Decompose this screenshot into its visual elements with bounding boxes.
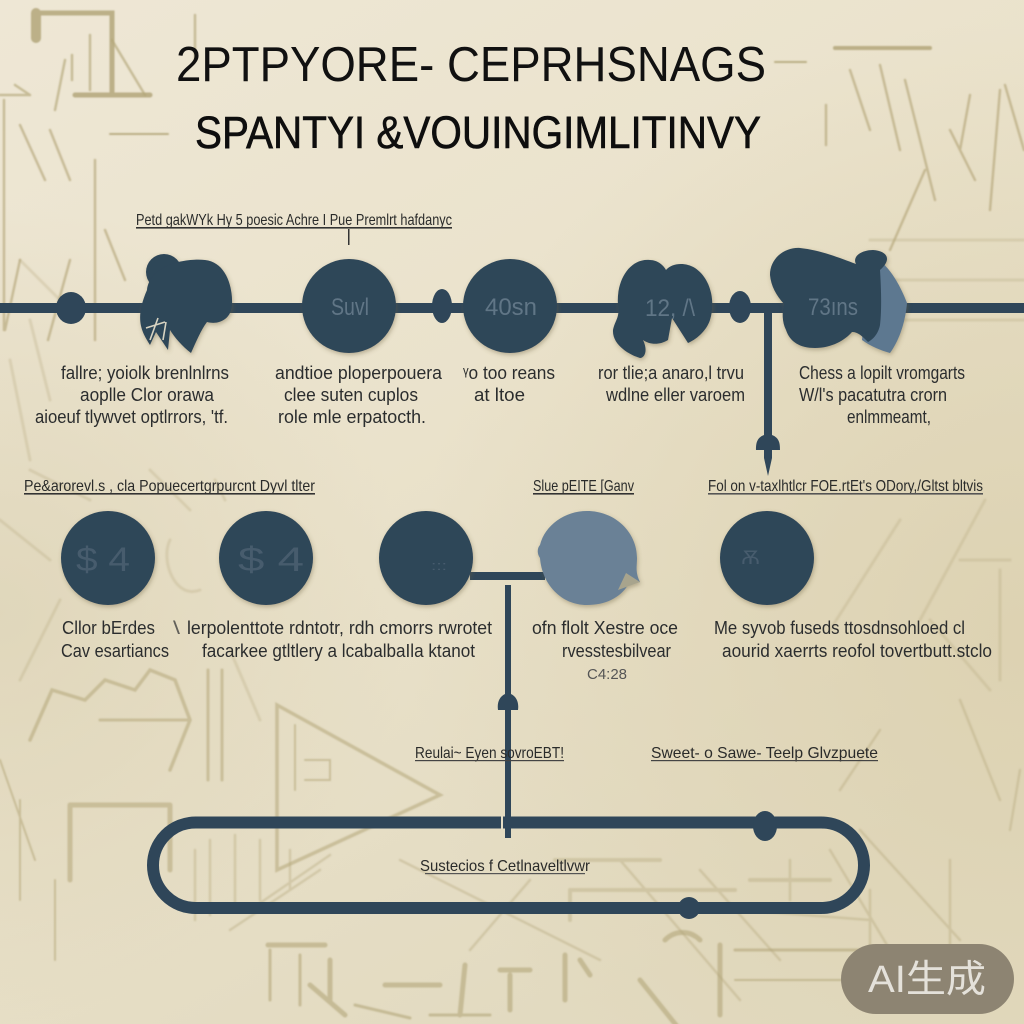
circle icon B: $ 4 — [238, 541, 304, 579]
caption D: ofn flolt Xestre oce — [532, 618, 678, 638]
connector down with arrow — [756, 307, 780, 476]
caption 4: ror tlie;a anaro,l trvu — [598, 363, 744, 383]
circle icon A — [61, 511, 155, 605]
small node 1 — [56, 292, 86, 324]
watermark badge: AI生成 — [868, 959, 986, 1001]
caption 1: aoplle Clor orawa — [80, 385, 215, 405]
caption E — [714, 618, 992, 661]
caption 4 — [598, 363, 745, 405]
loop node top — [753, 811, 777, 841]
title line 2: SPANTYI &VOUINGIMLITINVY — [195, 107, 761, 158]
blob node 5 — [770, 248, 907, 353]
vertical connector with arrow — [498, 585, 518, 838]
caption A: Cav esartiancs — [61, 641, 169, 661]
rounded loop track — [153, 811, 864, 919]
caption D — [532, 618, 678, 683]
circle node 3: 40sn — [485, 294, 537, 321]
section heading: top timeline: Petd gakWYk Hy 5 poesic Achre I Pue Premlrt hafdanyc — [136, 212, 452, 229]
circle node 2 — [302, 259, 396, 353]
caption 3: at ltoe — [474, 385, 525, 405]
bottom label left: Reulai~ Eyen sovroEBT! — [415, 745, 564, 762]
caption E: Me syvob fuseds ttosdnsohloed cl — [714, 618, 965, 638]
caption 5: enlmmeamt, — [847, 407, 931, 427]
caption B and C: lerpolenttote rdntotr, rdh cmorrs rwrotet — [187, 618, 492, 638]
caption 1: fallre; yoiolk brenlnlrns — [61, 363, 229, 383]
circle icon D, light — [538, 511, 640, 605]
top timeline with nodes — [0, 248, 1024, 476]
caption 2: andtioe ploperpouera — [275, 363, 443, 383]
title line 1: 2PTPYORE- CEPRHSNAGS — [176, 38, 766, 92]
caption 4: wdlne eller varoem — [605, 385, 745, 405]
caption B and C — [173, 618, 492, 661]
circle node 2: Suvl — [331, 294, 369, 321]
circle icon E — [720, 511, 814, 605]
caption 2: role mle erpatocth. — [278, 407, 426, 427]
second row connector — [470, 572, 545, 580]
timeline bar — [0, 303, 1024, 313]
caption B and C: facarkee gtltlery a lcabalbaIla ktanot — [202, 641, 475, 661]
caption E: aourid xaerrts reofol tovertbutt.stclo — [722, 641, 992, 661]
blob node 1 — [140, 254, 232, 353]
bottom label right: Sweet- o Sawe- Teelp Glvzpuete — [651, 745, 878, 762]
small node 5 — [729, 291, 751, 323]
loop center label: Sustecios f Cetlnaveltlvwr — [420, 858, 591, 875]
caption 1: aioeuf tlywvet optlrrors, 'tf. — [35, 407, 228, 427]
circle icon E: Ѫ — [741, 548, 760, 569]
caption 3: ᵞo too reans — [463, 363, 555, 383]
loop node bottom — [678, 897, 700, 919]
caption 5: Chess a lopilt vromgarts — [799, 363, 965, 383]
circle icon A: $ 4 — [76, 541, 130, 579]
caption 1 — [35, 363, 229, 427]
caption D: C4:28 — [587, 666, 627, 683]
blob node 5: 73ıns — [808, 294, 858, 321]
caption 3 — [463, 363, 555, 405]
caption 5: W/l's pacatutra crorn — [799, 385, 947, 405]
caption A: Cllor bErdes — [62, 618, 155, 638]
caption 5 — [799, 363, 965, 427]
circle icon B — [219, 511, 313, 605]
caption B and C: \ — [173, 618, 180, 638]
title — [176, 38, 766, 158]
small node 3 — [432, 289, 452, 323]
circle node 3 — [463, 259, 557, 353]
caption A — [61, 618, 169, 661]
blob node 4: 12, /\ — [645, 295, 695, 322]
caption D: rvesstesbilvear — [562, 641, 671, 661]
caption 2: clee suten cuplos — [284, 385, 418, 405]
watermark badge — [841, 944, 1014, 1014]
blob node 4 — [613, 260, 712, 358]
section heading: second row left: Pe&arorevl.s , cla Popuecertgrpurcnt Dyvl tlter — [24, 478, 316, 495]
caption 2 — [275, 363, 443, 427]
circle icon C: ::: — [431, 558, 447, 573]
circle icon C — [379, 511, 473, 605]
section heading: second row middle: Slue pEITE [Ganv — [533, 478, 634, 495]
